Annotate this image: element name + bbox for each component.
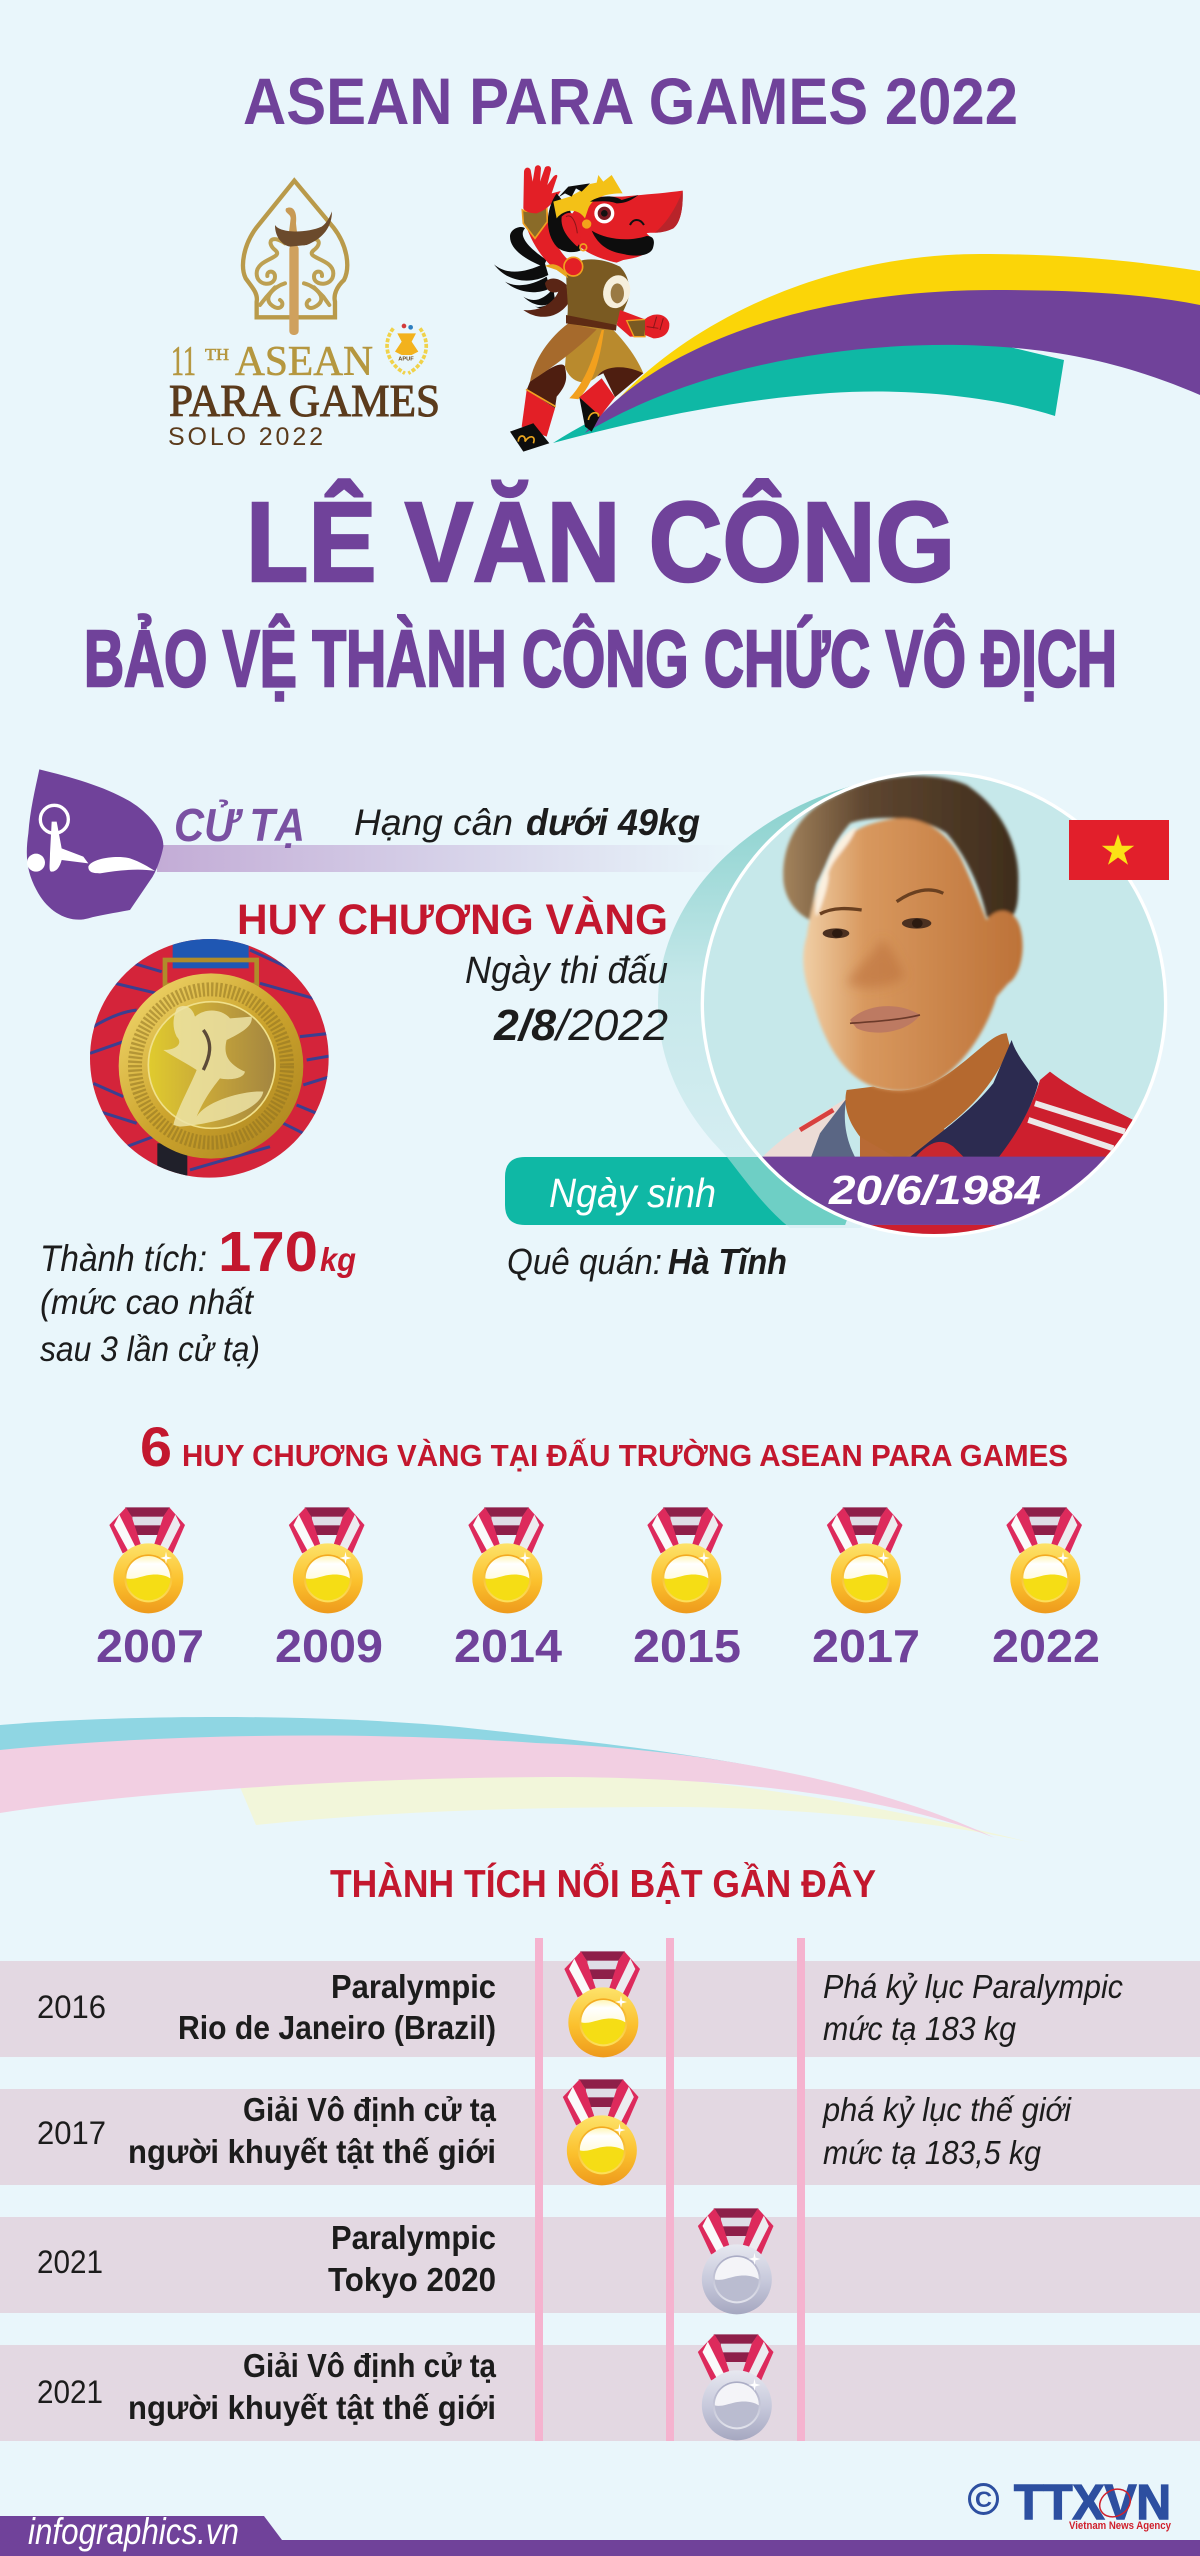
row 2016 bbox=[37, 1951, 1123, 2057]
ribbons: yellow, teal, purple bbox=[553, 254, 1200, 443]
row 2017: 2017 bbox=[37, 2115, 106, 2151]
text: Ngày sinh: Ngày sinh bbox=[549, 1170, 716, 1216]
medal 2015: 2015 bbox=[633, 1620, 741, 1672]
row 2021 Tokyo: 2021 bbox=[37, 2244, 103, 2280]
text: result: Thành tích: bbox=[40, 1238, 207, 1279]
text: sport name: CỬ TẠ bbox=[174, 799, 305, 851]
logo text: Solo 2022: SOLO 2022 bbox=[168, 423, 323, 451]
row 2021 world championship bbox=[37, 2334, 774, 2440]
row 2016: 2016 bbox=[37, 1989, 106, 2025]
row 2017: phá kỷ lục thế giới bbox=[822, 2091, 1073, 2128]
mascot: wayang character bbox=[494, 165, 683, 452]
medal 2022 bbox=[992, 1507, 1100, 1672]
text: result bbox=[40, 1220, 356, 1369]
heading: six gold medals bbox=[140, 1415, 1068, 1478]
row 2016: Paralympic bbox=[331, 1968, 496, 2005]
text: hometown bbox=[507, 1241, 787, 1282]
row 2021 world championship: 2021 bbox=[37, 2374, 103, 2410]
logo text: 11th ASEAN: 11 bbox=[171, 339, 196, 385]
number: 170 kg: kg bbox=[320, 1241, 356, 1278]
medal 2015 bbox=[633, 1507, 741, 1672]
row 2016: mức tạ 183 kg bbox=[823, 2010, 1017, 2047]
text: weight class bbox=[354, 802, 700, 843]
pill: birth date label bbox=[505, 1157, 870, 1225]
row 2021 world championship: người khuyết tật thế giới bbox=[128, 2389, 496, 2426]
medal 2009 bbox=[275, 1507, 383, 1672]
medal 2014: 2014 bbox=[454, 1620, 562, 1672]
text: result: (mức cao nhất bbox=[40, 1283, 254, 1322]
medal 2007: 2007 bbox=[96, 1620, 204, 1672]
logo: TTXVN copyright: TTXVN bbox=[1014, 2476, 1171, 2530]
text: competition date: /2022 bbox=[553, 1001, 668, 1050]
logo: TTXVN copyright: Vietnam News Agency bbox=[1069, 2520, 1172, 2532]
row 2021 Tokyo: Tokyo 2020 bbox=[328, 2261, 496, 2298]
heading: six gold medals: 6 bbox=[140, 1415, 172, 1478]
heading: ASEAN Para Games 2022: ASEAN PARA GAMES 2022 bbox=[243, 64, 1018, 138]
logo text: 11th ASEAN bbox=[171, 339, 373, 385]
medal 2007 bbox=[96, 1507, 204, 1672]
text: hometown: Quê quán: bbox=[507, 1241, 662, 1282]
main title: Lê Văn Công: LÊ VĂN CÔNG bbox=[246, 479, 955, 605]
medal 2009: 2009 bbox=[275, 1620, 383, 1672]
text: competition date: 2/8 bbox=[493, 1001, 557, 1050]
text: competition date: Ngày thi đấu bbox=[465, 950, 668, 992]
text: weight class: Hạng cân bbox=[354, 802, 513, 843]
medal 2014 bbox=[454, 1507, 562, 1672]
logo text: 11th ASEAN: ASEAN bbox=[235, 339, 373, 385]
row 2017: Giải Vô định cử tạ bbox=[243, 2091, 497, 2128]
number: 170 kg bbox=[218, 1220, 356, 1284]
medal 2017: 2017 bbox=[812, 1620, 920, 1672]
number: 170 kg: 170 bbox=[218, 1220, 318, 1284]
ribbons: pastel swoosh bbox=[0, 1717, 1033, 1843]
logo: TTXVN copyright: C bbox=[975, 2487, 992, 2512]
logo text: Para Games: PARA GAMES bbox=[169, 375, 440, 426]
text: birth date: 20/6/1984 bbox=[828, 1167, 1041, 1213]
medal 2022: 2022 bbox=[992, 1620, 1100, 1672]
row 2021 Tokyo bbox=[37, 2208, 774, 2314]
text: weight class: dưới 49kg bbox=[526, 802, 700, 843]
table: achievements bbox=[0, 1938, 1200, 2441]
crescent behind photo bbox=[658, 785, 1000, 1228]
text: competition date bbox=[465, 950, 668, 1050]
footer bar bbox=[0, 2511, 1200, 2556]
row 2021 Tokyo: Paralympic bbox=[331, 2219, 496, 2256]
heading: recent achievements: THÀNH TÍCH NỔI BẬT GẦN ĐÂY bbox=[330, 1861, 876, 1906]
photo: gold medal bbox=[90, 937, 330, 1180]
text: hometown: Hà Tĩnh bbox=[668, 1241, 787, 1282]
band: weight class background bbox=[157, 845, 735, 872]
text: infographics.vn: infographics.vn bbox=[28, 2511, 239, 2552]
row 2021 world championship: Giải Vô định cử tạ bbox=[243, 2347, 497, 2384]
icon: APUF emblem: APUF bbox=[398, 357, 414, 363]
photo: athlete portrait bbox=[700, 771, 1170, 1245]
medal row: six gold years bbox=[96, 1507, 1100, 1672]
icon: weightlifting leaf bbox=[27, 769, 163, 920]
row 2016: Rio de Janeiro (Brazil) bbox=[178, 2009, 496, 2046]
logo text: 11th ASEAN: TH bbox=[205, 345, 229, 364]
icon: gunungan with kris bbox=[243, 181, 347, 335]
row 2017: mức tạ 183,5 kg bbox=[823, 2134, 1042, 2171]
medal 2017 bbox=[812, 1507, 920, 1672]
text: gold medal heading: HUY CHƯƠNG VÀNG bbox=[237, 896, 668, 944]
row 2016: Phá kỷ lục Paralympic bbox=[823, 1968, 1123, 2005]
logo: 11th ASEAN Para Games Solo 2022 bbox=[168, 181, 440, 451]
text: result: sau 3 lần cử tạ) bbox=[40, 1330, 260, 1369]
icon: Vietnam flag bbox=[1069, 820, 1169, 880]
row 2017 bbox=[37, 2079, 1073, 2185]
row 2017: người khuyết tật thế giới bbox=[128, 2133, 496, 2170]
icon: APUF emblem bbox=[387, 324, 426, 373]
heading: six gold medals: HUY CHƯƠNG VÀNG TẠI ĐẤU TRƯỜNG ASEAN PARA GAMES bbox=[182, 1437, 1068, 1473]
